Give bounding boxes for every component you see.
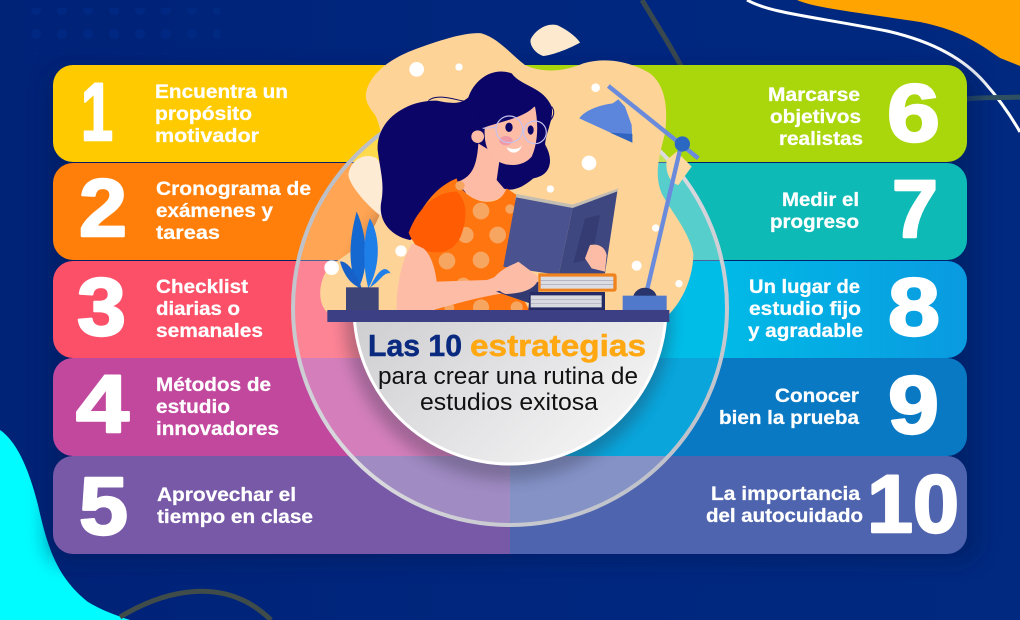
hand left: [493, 262, 538, 294]
decorative line: olive curve bottom: [120, 591, 271, 620]
item 8: [748, 262, 940, 353]
dots: white sparkles: [324, 62, 683, 287]
item 3: [77, 262, 263, 353]
fringe: [480, 88, 535, 128]
cheek: [499, 136, 513, 145]
item 2: exámenes y: [156, 201, 273, 222]
item 3: 3: [77, 262, 126, 353]
item 7: Medir el: [782, 190, 859, 211]
title: Las 10: Las 10: [368, 328, 462, 363]
plant: [340, 212, 391, 311]
item 2: [79, 163, 311, 254]
face: [485, 107, 537, 165]
item 3: semanales: [156, 321, 263, 342]
central glass circle: [291, 132, 729, 527]
item 5: [79, 461, 313, 552]
item 8: 8: [888, 262, 940, 353]
lamp: [579, 86, 698, 312]
bar 5: [53, 456, 511, 554]
hand right: [585, 245, 607, 272]
inner white circle: [354, 152, 666, 464]
stack of books: [528, 273, 617, 310]
item 10: 10: [867, 459, 959, 550]
smile: [507, 145, 522, 153]
item 5: 5: [79, 461, 128, 552]
item 1: Encuentra un: [155, 82, 288, 103]
item 4: 4: [76, 359, 129, 450]
subtitle line 1: para crear una rutina de: [378, 363, 638, 390]
item 2: tareas: [156, 223, 220, 244]
blob: pale left: [348, 156, 384, 217]
item 10: del autocuidado: [706, 506, 863, 527]
item 1: 1: [81, 67, 113, 158]
subtitle line 2: estudios exitosa: [420, 389, 599, 416]
bar 4: [53, 358, 511, 456]
item 5: tiempo en clase: [157, 507, 313, 528]
item 4: Métodos de: [156, 375, 271, 396]
item 4: innovadores: [156, 419, 279, 440]
item 1: propósito: [155, 104, 252, 125]
item 6: objetivos: [770, 107, 861, 128]
blob: cream small top: [530, 25, 580, 56]
eyes: [505, 123, 534, 135]
item 10: [706, 459, 959, 550]
title: [368, 328, 646, 416]
item 9: Conocer: [775, 386, 860, 407]
item 2: 2: [79, 163, 127, 254]
item 8: y agradable: [748, 321, 863, 342]
item 8: estudio fijo: [749, 299, 861, 320]
glasses: [483, 116, 546, 144]
title: estrategias: estrategias: [470, 328, 646, 363]
open book: [503, 188, 618, 275]
item 1: motivador: [155, 126, 260, 147]
item 3: Checklist: [156, 277, 249, 298]
blob: peach background: [320, 33, 693, 315]
item 1: [81, 67, 288, 158]
bar 6: [510, 65, 967, 162]
item 2: Cronograma de: [156, 179, 311, 200]
decorative shape: cyan corner: [0, 430, 130, 620]
item 4: estudio: [156, 397, 230, 418]
item 9: 9: [888, 360, 939, 451]
item 6: Marcarse: [768, 85, 860, 106]
decorative line: olive curve top: [642, 0, 681, 66]
item 9: [719, 360, 939, 451]
blob: pale right: [666, 152, 692, 185]
book cover bottom: [496, 282, 538, 303]
bars shadow: [48, 70, 978, 562]
hair strand: [428, 97, 554, 170]
bar 7: [510, 163, 967, 260]
item 4: [76, 359, 279, 450]
item 5: Aprovechar el: [157, 485, 296, 506]
bar 3: [53, 261, 511, 358]
left bars: [53, 65, 511, 554]
item 7: 7: [892, 164, 938, 255]
item 9: bien la prueba: [719, 408, 859, 429]
item 6: realistas: [779, 129, 863, 150]
item 6: 6: [887, 68, 940, 159]
item 7: progreso: [770, 212, 859, 233]
bar 1: [53, 65, 511, 162]
item 10: La importancia: [711, 484, 860, 505]
bar 2: [53, 163, 511, 260]
bar 8: [510, 261, 967, 358]
bar 9: [510, 358, 967, 456]
neck: [458, 143, 507, 201]
arm: [397, 243, 537, 313]
illustration: woman reading at desk: [320, 25, 698, 322]
decorative shape: orange corner: [797, 0, 1020, 66]
decorative dot pattern: [20, 8, 220, 54]
decorative line: olive curve right: [967, 97, 1020, 99]
item 8: Un lugar de: [749, 277, 860, 298]
item 3: diarias o: [156, 299, 240, 320]
shirt: [410, 178, 530, 312]
desk: [327, 310, 669, 322]
item 7: [770, 164, 938, 255]
shirt dots: [427, 181, 523, 315]
bar 10: [510, 456, 967, 554]
decorative line: white curve: [747, 0, 1020, 132]
ear: [471, 130, 484, 143]
item 6: [768, 68, 940, 159]
sleeve: [409, 192, 465, 252]
hair: [378, 71, 552, 240]
right bars: [510, 65, 967, 554]
